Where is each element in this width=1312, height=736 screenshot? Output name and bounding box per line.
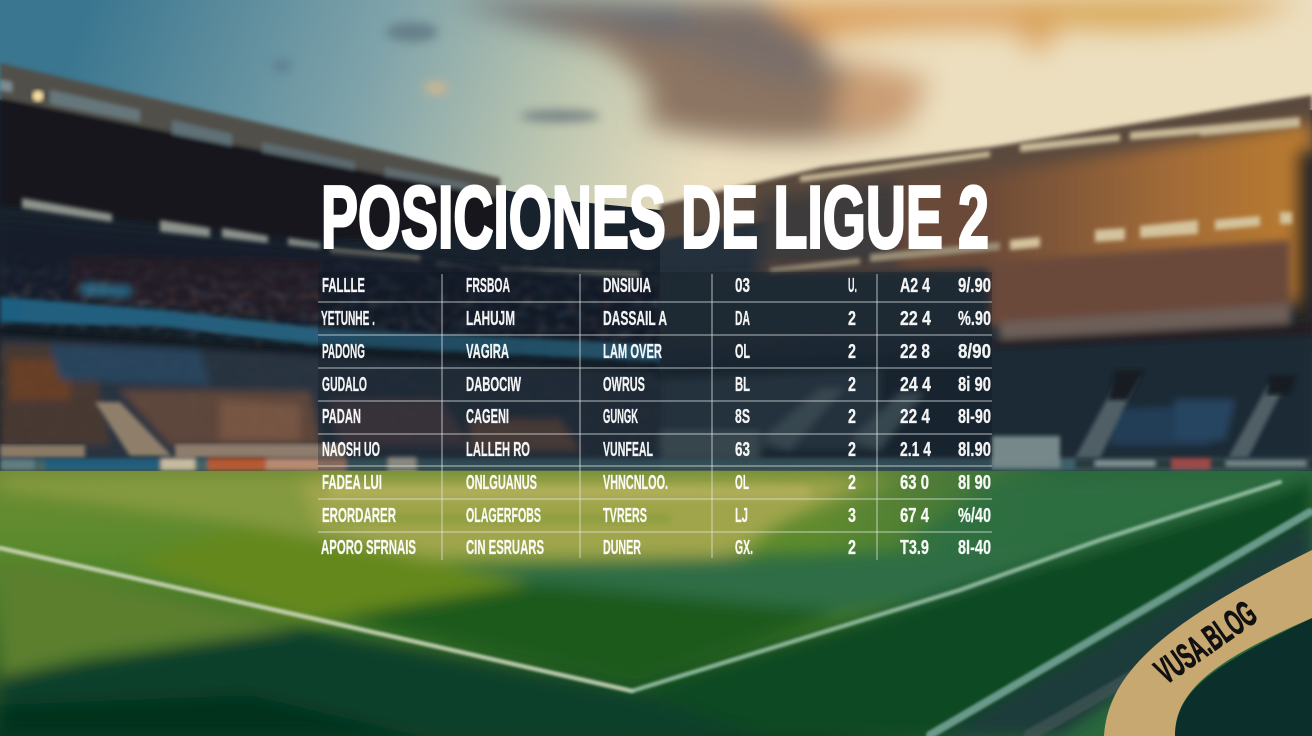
row 3: 2 xyxy=(848,341,856,363)
row 7: 2 xyxy=(848,472,856,494)
row 1 xyxy=(322,275,991,297)
row 6: NAOSH UO xyxy=(322,439,380,461)
pitch light patches xyxy=(0,476,1312,736)
row 7: 8I 90 xyxy=(958,472,991,494)
left stand xyxy=(0,62,660,460)
floodlight xyxy=(32,90,44,102)
row 7: VHNCNLOO. xyxy=(603,472,668,494)
row 7: OL xyxy=(735,472,749,494)
row 8: OLAGERFOBS xyxy=(466,505,541,527)
row 7: 63 0 xyxy=(900,472,929,494)
row 4: OWRUS xyxy=(603,374,645,396)
row 7: ONLGUANUS xyxy=(466,472,537,494)
row 8: TVRERS xyxy=(603,505,647,527)
pitch stripes xyxy=(330,486,810,523)
row 2: 22 4 xyxy=(900,308,932,330)
row 1: FALLLE xyxy=(322,275,365,297)
row 5 xyxy=(322,406,991,428)
row 8: LJ xyxy=(735,505,748,527)
row 2: 2 xyxy=(848,308,856,330)
row 4: BL xyxy=(735,374,750,396)
row 3: VAGIRA xyxy=(466,341,509,363)
row 9: CIN ESRUARS xyxy=(466,537,544,559)
right light strips xyxy=(1010,212,1292,250)
advertising boards xyxy=(0,436,1312,471)
row 9: GX. xyxy=(735,537,753,559)
corner badge xyxy=(1104,550,1312,736)
left light strips xyxy=(22,198,320,250)
row 8 xyxy=(322,505,991,527)
sky xyxy=(0,0,1312,260)
row 4: DABOCIW xyxy=(466,374,521,396)
row 9: 8I-40 xyxy=(958,537,991,559)
row 2: DASSAIL A xyxy=(603,308,667,330)
row 1: FRSBOA xyxy=(466,275,510,297)
left lower crowd xyxy=(0,325,660,462)
row 3 xyxy=(322,341,991,363)
row 2: LAHUJM xyxy=(466,308,515,330)
row 9: T3.9 xyxy=(900,537,929,559)
row 8: 3 xyxy=(848,505,856,527)
badge inner dark corner xyxy=(1175,618,1312,736)
row 8: %/40 xyxy=(958,505,991,527)
row 4: 24 4 xyxy=(900,374,932,396)
row 1: 03 xyxy=(735,275,750,297)
row 7 xyxy=(322,472,991,494)
row 6: 2 xyxy=(848,439,856,461)
row 7: FADEA LUI xyxy=(322,472,382,494)
row 2: YETUNHE . xyxy=(321,308,375,330)
row 3: 8/90 xyxy=(958,341,991,363)
badge arc xyxy=(1104,550,1312,736)
row 6: LALLEH RO xyxy=(466,439,530,461)
row 6: VUNFEAL xyxy=(603,439,653,461)
row 1: DNSIUIA xyxy=(603,275,651,297)
row 6: 2.1 4 xyxy=(900,439,932,461)
row 3: LAM OVER xyxy=(603,341,662,363)
row 1: 9/.90 xyxy=(958,275,991,297)
row 2: DA xyxy=(735,308,750,330)
concrete steps xyxy=(95,402,172,456)
row 9: APORO SFRNAIS xyxy=(321,537,416,559)
row 5: 22 4 xyxy=(900,406,931,428)
row 4: GUDALO xyxy=(322,374,367,396)
row 3: 22 8 xyxy=(900,341,930,363)
row 5: CAGENI xyxy=(466,406,509,428)
row 9 xyxy=(321,537,991,559)
row 6 xyxy=(322,439,991,461)
table area tint xyxy=(318,272,992,470)
pitch xyxy=(0,471,1312,736)
left upper crowd xyxy=(0,222,660,345)
right roof lights xyxy=(800,117,1300,182)
right crowd xyxy=(660,240,1312,458)
row 8: 67 4 xyxy=(900,505,930,527)
pitch lines xyxy=(0,482,1310,735)
row 9: 2 xyxy=(848,537,856,559)
row 5: GUNGK xyxy=(603,406,638,428)
row 1: U. xyxy=(848,275,857,297)
row 5: PADAN xyxy=(322,406,361,428)
row 5: 2 xyxy=(848,406,856,428)
row 6: 63 xyxy=(735,439,750,461)
row 5: 8S xyxy=(735,406,750,428)
row 3: OL xyxy=(735,341,750,363)
row 4: 2 xyxy=(848,374,856,396)
right stand xyxy=(660,95,1312,470)
standings table xyxy=(318,274,992,560)
row 2 xyxy=(321,308,991,330)
row 6: 8I.90 xyxy=(958,439,991,461)
row 9: DUNER xyxy=(603,537,641,559)
row 4 xyxy=(322,374,991,396)
table grid lines xyxy=(318,274,992,560)
row 4: 8i 90 xyxy=(958,374,991,396)
row 8: ERORDARER xyxy=(322,505,396,527)
row 3: PADONG xyxy=(322,341,365,363)
blue band xyxy=(0,297,1312,362)
left roof xyxy=(0,63,500,240)
crowd texture xyxy=(0,270,660,346)
row 1: A2 4 xyxy=(900,275,931,297)
row 5: 8I-90 xyxy=(958,406,991,428)
row 2: %.90 xyxy=(958,308,991,330)
